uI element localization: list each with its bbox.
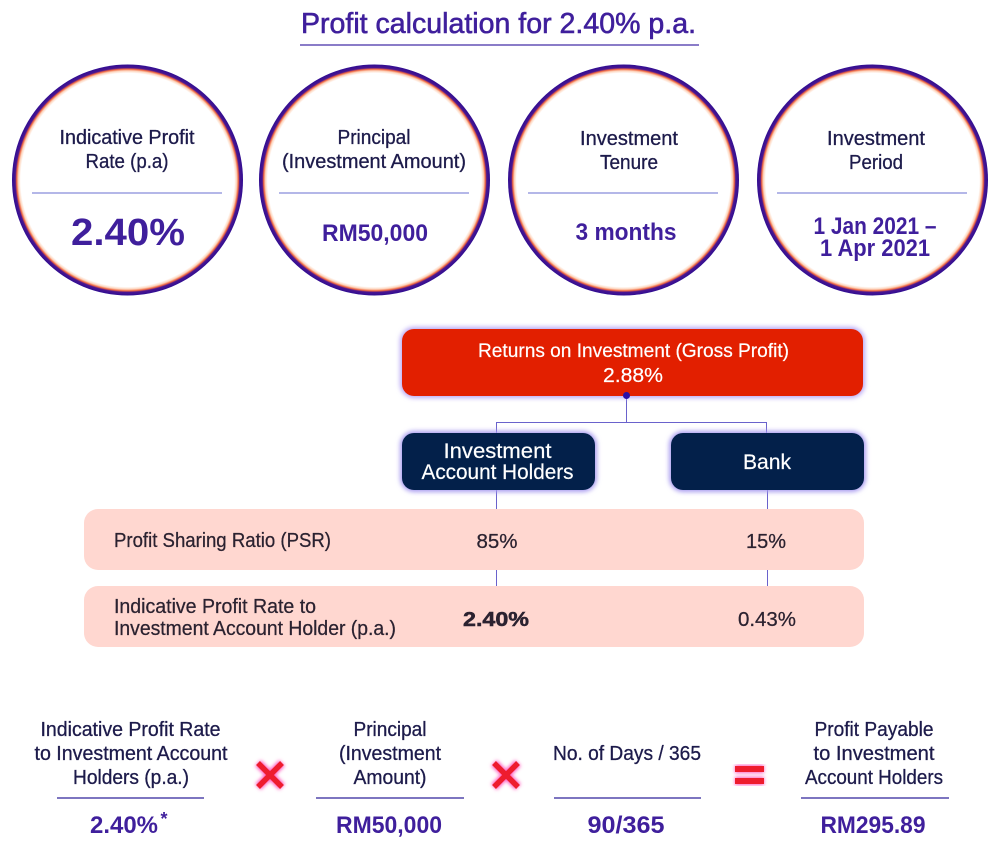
panel: principal circle: (Investment Amount) — [282, 151, 466, 173]
panel: bank box — [669, 431, 866, 492]
icon: equals — [735, 769, 764, 781]
formula: profit payable — [801, 719, 949, 839]
panel: indicative profit rate row: Investment Account Holder (p.a.) — [114, 618, 396, 640]
panel: investment period circle: Investment — [827, 128, 925, 150]
panel: principal circle: RM50,000 — [322, 220, 428, 247]
formula: number of days — [553, 743, 701, 839]
panel: investment tenure circle — [508, 64, 739, 296]
panel: profit sharing ratio row: Profit Sharing Ratio (PSR) — [114, 530, 331, 552]
connector lines — [496, 396, 768, 586]
panel: gross profit box — [400, 327, 865, 399]
formula: profit rate: * — [160, 809, 168, 829]
formula: profit rate: 2.40% — [90, 812, 158, 839]
panel: investment account holders box — [400, 431, 597, 492]
icon: multiply — [494, 763, 518, 787]
panel: profit sharing ratio row: 85% — [476, 531, 518, 553]
formula: principal: Principal — [354, 719, 426, 741]
panel: investment account holders box: Account Holders — [422, 461, 574, 484]
formula: number of days: 90/365 — [588, 812, 664, 839]
panel: indicative profit rate row: 2.40% — [463, 609, 529, 631]
panel: indicative profit rate circle — [12, 64, 243, 296]
panel: investment period circle: 1 Apr 2021 — [820, 235, 930, 262]
panel: profit sharing ratio row — [84, 509, 864, 570]
formula: profit payable: RM295.89 — [820, 812, 926, 839]
formula: number of days: No. of Days / 365 — [553, 743, 701, 765]
formula: profit rate — [34, 719, 228, 839]
panel: profit sharing ratio row: 15% — [746, 531, 786, 553]
formula: profit payable: Account Holders — [805, 767, 943, 789]
formula: profit rate: Indicative Profit Rate — [40, 719, 220, 741]
title: Profit calculation for 2.40% p.a. — [301, 8, 696, 40]
icon: multiply — [258, 763, 282, 787]
panel: indicative profit rate circle: Rate (p.a) — [86, 151, 168, 173]
panel: investment period circle — [757, 64, 988, 296]
formula: profit payable: to Investment — [814, 743, 935, 765]
panel: investment period circle: Period — [849, 152, 903, 174]
formula: profit rate: Holders (p.a.) — [73, 767, 189, 789]
panel: investment tenure circle: Tenure — [600, 152, 658, 174]
panel: indicative profit rate row: 0.43% — [738, 609, 796, 631]
panel: principal circle — [259, 64, 490, 296]
panel: investment tenure circle: Investment — [580, 128, 678, 150]
panel: principal circle: Principal — [338, 127, 410, 149]
formula: profit payable: Profit Payable — [814, 719, 934, 741]
panel: bank box: Bank — [743, 451, 791, 474]
panel: indicative profit rate circle: 2.40% — [71, 212, 185, 254]
panel: gross profit box: 2.88% — [603, 365, 663, 387]
formula: principal: (Investment — [339, 743, 441, 765]
panel: investment tenure circle: 3 months — [576, 219, 676, 246]
panel: gross profit box: Returns on Investment (Gross Profit) — [478, 341, 789, 362]
panel: indicative profit rate row: Indicative Profit Rate to — [114, 596, 316, 618]
panel: investment period circle: 1 Jan 2021 – — [814, 213, 936, 240]
formula: principal: Amount) — [354, 767, 426, 789]
panel: indicative profit rate row — [84, 586, 864, 647]
formula: profit rate: to Investment Account — [34, 743, 228, 765]
panel: investment account holders box: Investment — [444, 440, 552, 463]
formula: principal: RM50,000 — [336, 812, 442, 839]
panel: indicative profit rate circle: Indicative Profit — [60, 127, 195, 149]
formula: principal — [316, 719, 464, 839]
